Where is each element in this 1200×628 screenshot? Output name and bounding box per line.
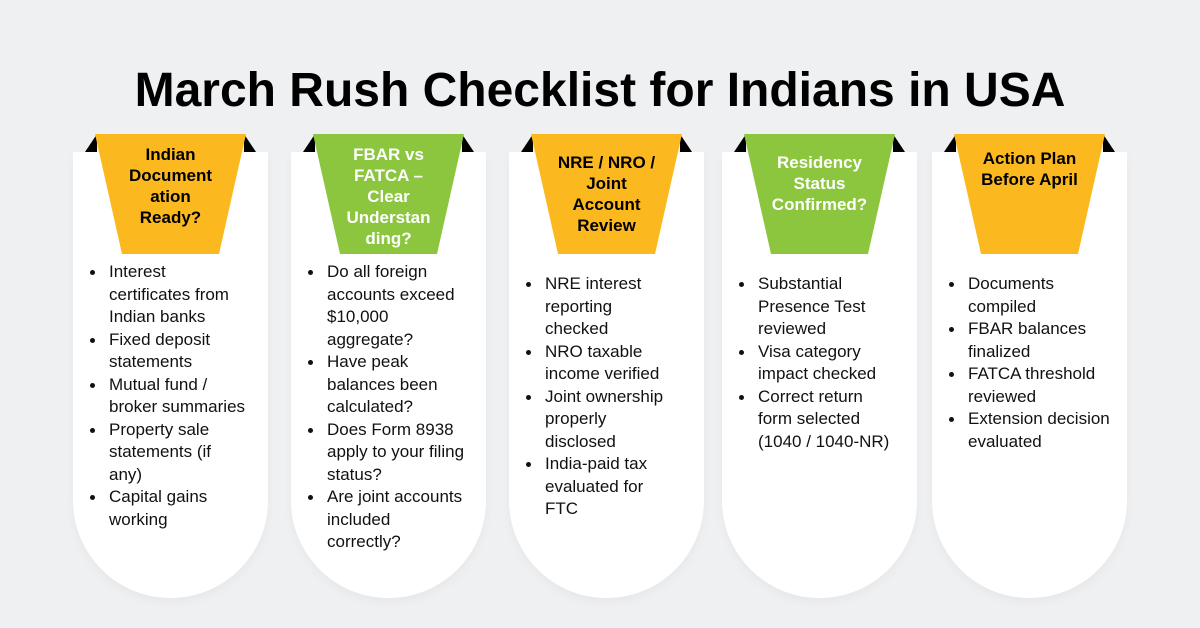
list: action plan: reviewed	[968, 386, 1036, 406]
list: NRE: evaluated for	[545, 476, 643, 496]
list: FBAR: accounts exceed	[327, 284, 455, 304]
header: NRE / NRO: Joint	[586, 174, 627, 193]
list: FBAR: balances been	[327, 374, 438, 394]
list: residency	[739, 274, 889, 450]
header: NRE / NRO: Account	[572, 195, 640, 214]
header: FBAR vs FATCA: Clear	[367, 187, 410, 206]
list: documentation: broker summaries	[109, 397, 245, 416]
header: Residency status	[734, 134, 905, 254]
list: NRE: reporting	[545, 296, 612, 316]
list: documentation: certificates from	[109, 284, 229, 304]
header: Residency status: Residency	[777, 153, 862, 172]
list: residency: (1040 / 1040-NR)	[758, 432, 889, 450]
list: FBAR: Have peak	[327, 352, 408, 371]
list: documentation: Property sale	[109, 420, 209, 438]
list: action plan: compiled	[968, 296, 1036, 316]
header: NRE / NRO: Review	[577, 216, 636, 235]
panel: Indian documentation	[73, 152, 268, 598]
list: FBAR: $10,000	[327, 307, 388, 326]
list: NRE: Joint ownership	[545, 386, 663, 406]
list: documentation: working	[109, 510, 168, 528]
list: action plan: Documents	[968, 274, 1054, 293]
header: Action plan: Before April	[981, 170, 1078, 189]
list: FBAR: Does Form 8938	[327, 420, 454, 438]
list: NRE: India-paid tax	[545, 454, 647, 473]
list: NRE	[526, 274, 663, 518]
header: Indian documentation: Ready?	[140, 208, 201, 227]
list: FBAR: included	[327, 510, 390, 528]
header: NRE / NRO: NRE / NRO /	[558, 153, 655, 172]
header: NRE / NRO	[521, 134, 692, 254]
title: March Rush Checklist for Indians in USA	[135, 64, 1065, 117]
list: NRE: disclosed	[545, 432, 616, 450]
list: documentation: Mutual fund /	[109, 374, 207, 394]
list: FBAR: aggregate?	[327, 330, 413, 348]
list: residency: Visa category	[758, 342, 861, 360]
list: residency: Presence Test	[758, 296, 865, 316]
list: documentation: statements	[109, 352, 192, 371]
list: FBAR: correctly?	[327, 532, 401, 551]
header: FBAR vs FATCA: FATCA –	[354, 166, 423, 185]
list: residency: Substantial	[758, 274, 842, 293]
list: documentation: any)	[109, 464, 142, 484]
list: residency: impact checked	[758, 364, 876, 383]
list: NRE: income verified	[545, 364, 659, 383]
list: action plan: FATCA threshold	[968, 364, 1095, 383]
list: residency: form selected	[758, 409, 860, 428]
header: FBAR vs FATCA: ding?	[365, 229, 412, 248]
header: Action plan	[944, 134, 1115, 254]
list: documentation	[90, 262, 245, 528]
list: FBAR	[308, 262, 464, 551]
list: action plan: Extension decision	[968, 409, 1110, 428]
list: documentation: statements (if	[109, 442, 211, 461]
list: FBAR: calculated?	[327, 397, 413, 416]
list: action plan: finalized	[968, 342, 1030, 360]
list: NRE: NRO taxable	[545, 342, 642, 360]
list: FBAR: Are joint accounts	[327, 487, 462, 506]
header: Residency status: Status	[794, 174, 845, 193]
list: documentation: Capital gains	[109, 487, 207, 506]
panel: Action plan	[932, 152, 1127, 598]
list: FBAR: apply to your filing	[327, 442, 464, 461]
list: FBAR: Do all foreign	[327, 262, 427, 281]
header: Indian documentation: Indian	[145, 145, 196, 164]
header: FBAR vs FATCA	[303, 134, 474, 254]
list: documentation: Indian banks	[109, 307, 205, 326]
panel: NRE / NRO	[509, 152, 704, 598]
list: action plan: FBAR balances	[968, 319, 1086, 338]
list: residency: reviewed	[758, 319, 826, 338]
list: documentation: Fixed deposit	[109, 330, 210, 348]
list: NRE: checked	[545, 319, 608, 338]
list: NRE: NRE interest	[545, 274, 641, 293]
list: residency: Correct return	[758, 386, 863, 406]
list: documentation: Interest	[109, 262, 166, 281]
header: Indian documentation: ation	[150, 187, 191, 206]
header: Indian documentation: Document	[129, 166, 212, 185]
list: action plan: evaluated	[968, 432, 1042, 450]
list: NRE: properly	[545, 409, 606, 428]
header: FBAR vs FATCA: Understan	[346, 208, 431, 227]
header: FBAR vs FATCA: FBAR vs	[353, 145, 424, 164]
list: action plan	[949, 274, 1110, 450]
header: Residency status: Confirmed?	[772, 195, 867, 214]
panel: Residency status	[722, 152, 917, 598]
list: FBAR: status?	[327, 464, 382, 484]
panel: FBAR vs FATCA	[291, 152, 486, 598]
list: NRE: FTC	[545, 499, 578, 518]
header: Action plan: Action Plan	[983, 149, 1076, 168]
header: Indian documentation	[85, 134, 256, 254]
